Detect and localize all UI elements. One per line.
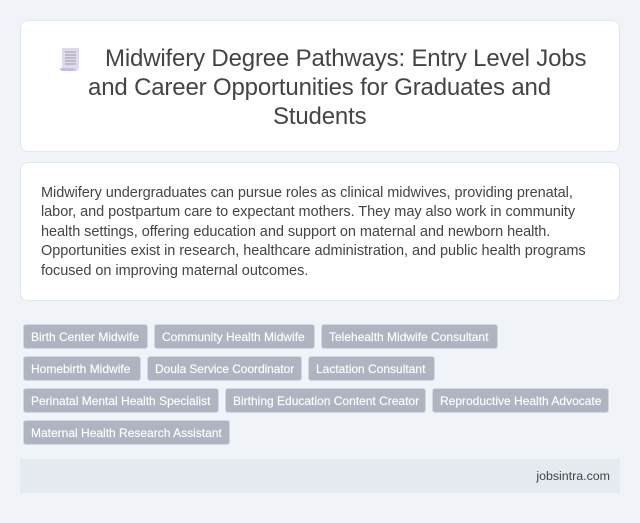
description text: labor, and postpartum care to expectant mothers. They may also work in community: [41, 204, 575, 220]
tag: Birthing Education Content Creator: [233, 394, 419, 408]
tag: Perinatal Mental Health Specialist: [31, 394, 210, 408]
footer source text: jobsintra.com: [536, 469, 610, 483]
description text: focused on improving maternal outcomes.: [41, 263, 308, 279]
title: and Career Opportunities for Graduates and: [88, 74, 551, 101]
title: [88, 45, 586, 130]
tag: Telehealth Midwife Consultant: [329, 330, 488, 344]
tag: [321, 324, 498, 349]
description text: health settings, offering education and support on maternal and newborn health.: [41, 224, 550, 240]
tag: Community Health Midwife: [162, 330, 305, 344]
tag: [225, 388, 426, 413]
tag: Maternal Health Research Assistant: [31, 426, 222, 440]
tag: Doula Service Coordinator: [155, 362, 294, 376]
tag: Reproductive Health Advocate: [440, 394, 601, 408]
footer bar: [20, 459, 620, 493]
icon: document scroll: [60, 48, 79, 71]
tag: [23, 420, 230, 445]
description text: [41, 185, 586, 279]
description text: Opportunities exist in research, healthcare administration, and public health programs: [41, 243, 586, 259]
tag: [154, 324, 315, 349]
tag: [23, 388, 219, 413]
job tags: [23, 324, 609, 445]
tag: Birth Center Midwife: [31, 330, 139, 344]
title: Midwifery Degree Pathways: Entry Level Jobs: [105, 45, 586, 72]
title: Students: [273, 103, 366, 130]
tag: [23, 324, 148, 349]
tag: [308, 356, 435, 381]
tag: Lactation Consultant: [316, 362, 425, 376]
description text: Midwifery undergraduates can pursue roles as clinical midwives, providing prenatal,: [41, 185, 573, 201]
tag: Homebirth Midwife: [31, 362, 130, 376]
tag: [147, 356, 302, 381]
tag: [432, 388, 609, 413]
panel: description card: [20, 162, 620, 301]
tag: [23, 356, 141, 381]
panel: title card: [20, 20, 620, 152]
